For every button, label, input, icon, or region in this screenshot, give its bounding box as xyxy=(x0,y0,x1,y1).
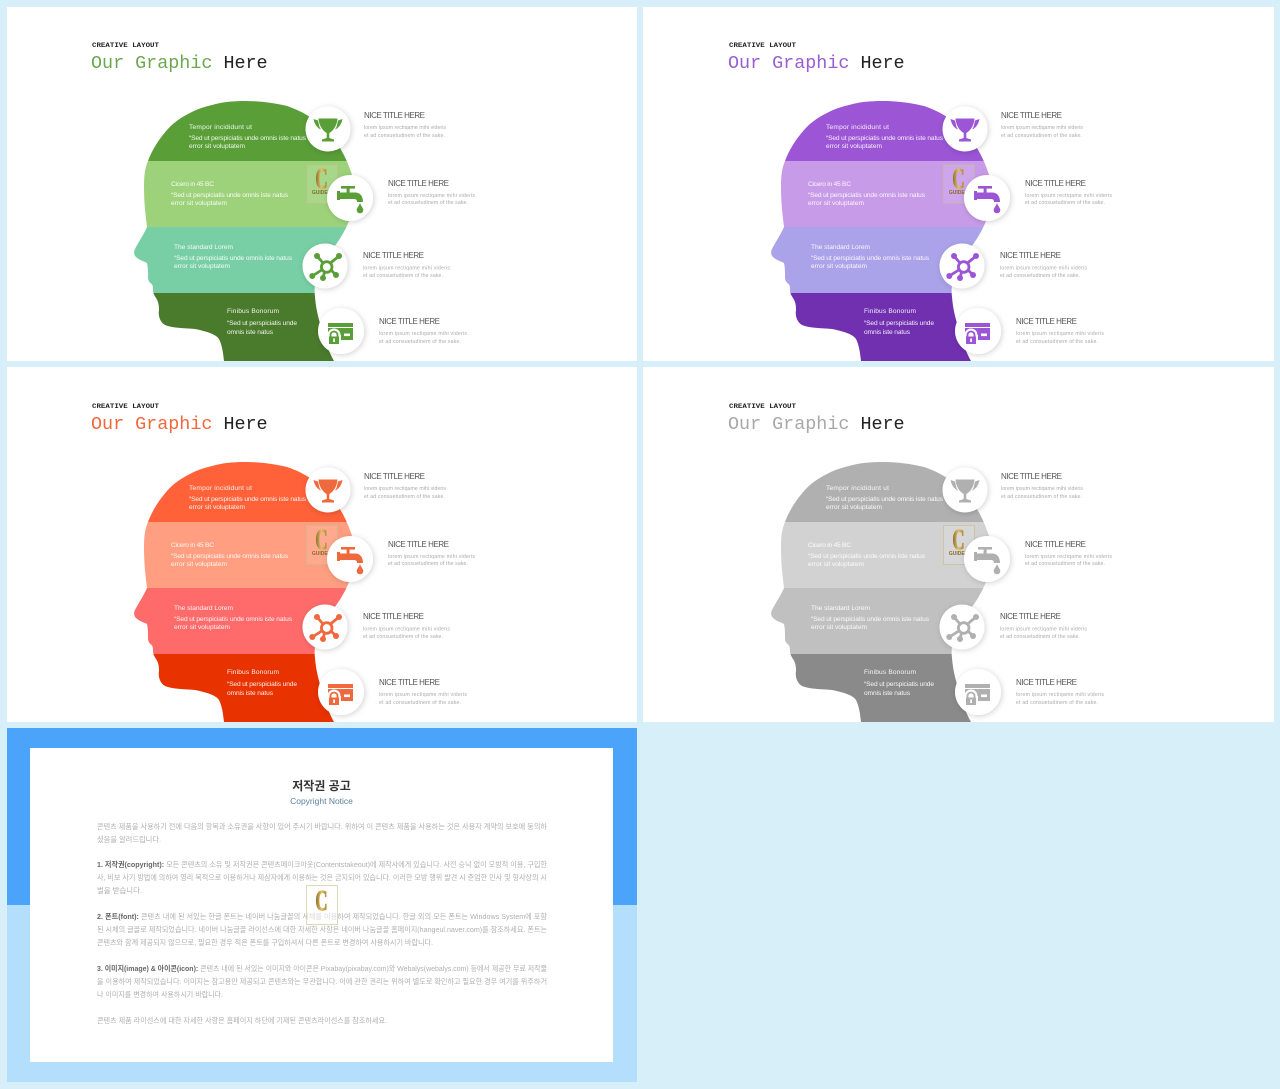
item text blocks: NICE TITLE HERE xyxy=(1016,317,1077,326)
head text blocks: “Sed ut perspiciatis unde omnis iste natus xyxy=(811,255,930,262)
head text blocks: omnis iste natus xyxy=(227,690,274,697)
item text blocks: NICE TITLE HERE xyxy=(1001,111,1062,120)
head text blocks: error sit voluptatem xyxy=(189,504,246,511)
icon: trophy xyxy=(942,106,988,152)
item text blocks: lorem ipsum rectiqame mihi videris xyxy=(1001,125,1083,131)
head text blocks: error sit voluptatem xyxy=(826,504,882,511)
heading: purple: CREATIVE LAYOUT xyxy=(729,42,796,49)
icon: card lock xyxy=(955,669,1001,715)
head text blocks: “Sed ut perspiciatis unde omnis iste natus xyxy=(171,192,289,199)
head text blocks: “Sed ut perspiciatis unde xyxy=(227,681,297,688)
head text blocks: omnis iste natus xyxy=(864,329,911,336)
copyright body text: 2. 폰트(font): 콘텐츠 내에 된 서있는 한글 폰트는 네이버 나눔글꼴의 서체를 이용하여 제작되었습니다. 한글 외의 모든 폰트는 Windows System에 포함 xyxy=(97,912,547,921)
item text blocks: lorem ipsum rectiqame mihi videris xyxy=(364,125,446,131)
item text blocks: lorem ipsum rectiqame mihi videris xyxy=(1025,554,1112,560)
head silhouette: orange bands xyxy=(134,462,352,722)
item text blocks xyxy=(1000,111,1112,345)
head text blocks xyxy=(171,124,307,336)
item text blocks: lorem ipsum rectiqame mihi videris xyxy=(388,193,475,199)
heading: purple: Our Graphic Here xyxy=(728,53,905,74)
heading: gray: Our Graphic Here xyxy=(728,414,905,435)
watermark xyxy=(306,886,338,924)
panel: purple head infographic xyxy=(643,7,1274,361)
head text blocks: “Sed ut perspiciatis unde xyxy=(864,320,934,327)
icon: card lock xyxy=(318,308,364,354)
heading: orange: Our Graphic Here xyxy=(91,414,268,435)
item text blocks: lorem ipsum rectiqame mihi videris xyxy=(363,626,450,632)
icon: network xyxy=(940,604,984,650)
head silhouette: green bands xyxy=(134,101,352,361)
copyright body text: 콘텐츠 제품 라이선스에 대한 자세한 사항은 홈페이지 하단에 기재된 콘텐츠라이선스를 참조하세요. xyxy=(97,1016,387,1025)
head text blocks: The standard Lorem xyxy=(174,244,234,251)
copyright heading: 저작권 공고 xyxy=(292,778,351,793)
watermark xyxy=(306,525,338,564)
watermark: C xyxy=(316,525,328,556)
item text blocks: et ad consuetudinem of the sake. xyxy=(364,133,445,139)
head text blocks: Tempor incididunt ut xyxy=(189,124,252,131)
icon: network xyxy=(940,244,984,288)
head text blocks: “Sed ut perspiciatis unde omnis iste natus xyxy=(808,553,926,560)
item text blocks: NICE TITLE HERE xyxy=(1001,472,1062,481)
heading: purple xyxy=(728,42,905,74)
head text blocks: The standard Lorem xyxy=(174,605,234,612)
head text blocks: Finibus Bonorum xyxy=(864,308,916,315)
head text blocks: “Sed ut perspiciatis unde xyxy=(864,681,934,688)
icon: tap xyxy=(327,536,373,582)
head text blocks: error sit voluptatem xyxy=(171,200,228,207)
icon: trophy xyxy=(306,468,350,512)
item text blocks: et ad consuetudinem of the sake. xyxy=(379,339,461,345)
watermark: C xyxy=(316,164,328,195)
copyright heading: Copyright Notice xyxy=(290,796,353,806)
icon: tap xyxy=(964,175,1010,221)
item text blocks: et ad consuetudinem of the sake. xyxy=(388,561,468,567)
item text blocks: et ad consuetudinem of the sake. xyxy=(1000,634,1080,640)
watermark: GUIDES xyxy=(312,190,332,196)
icon: card lock xyxy=(318,669,364,715)
panel: orange head infographic xyxy=(7,367,637,722)
copyright body text: 사, 비보 사기 방법에 의하여 영리 목적으로 이용하거나 제삼자에게 이용하는 것은 금지되어 있습니다. 이러한 모방 행위 발견 시 준엄한 민사 및 형사상의 시 xyxy=(97,873,547,882)
item text blocks: et ad consuetudinem of the sake. xyxy=(363,273,443,279)
item text blocks: lorem ipsum rectiqame mihi videris xyxy=(1025,193,1112,199)
panel: gray head infographic xyxy=(643,367,1274,722)
item text blocks: et ad consuetudinem of the sake. xyxy=(1016,339,1098,345)
copyright body text: 나 이미지를 변경하여 사용하시기 바랍니다. xyxy=(97,990,223,999)
watermark xyxy=(944,164,974,204)
head text blocks: omnis iste natus xyxy=(864,690,911,697)
item text blocks: NICE TITLE HERE xyxy=(1025,179,1086,188)
icon: trophy xyxy=(942,468,988,512)
watermark xyxy=(306,164,338,204)
copyright body text: 콘텐츠 제품을 사용하기 전에 다음의 항목과 소유권을 사항이 있어 주시기 바랍니다. 위하여 이 콘텐츠 제품을 사용하는 것은 사용자 계약의 보호에 동의하 xyxy=(97,822,547,831)
icon: card lock xyxy=(955,308,1001,354)
heading: orange: CREATIVE LAYOUT xyxy=(92,403,159,410)
item text blocks: et ad consuetudinem of the sake. xyxy=(379,700,461,706)
head text blocks: “Sed ut perspiciatis unde omnis iste natus xyxy=(174,616,293,623)
item text blocks xyxy=(1000,472,1112,706)
item text blocks: NICE TITLE HERE xyxy=(388,540,449,549)
watermark xyxy=(944,525,974,564)
copyright body text: 을 이용하여 제작되었습니다. 이미지는 참고용만 제공되고 콘텐츠와는 무관합니다. 이에 관한 권리는 위하여 별도로 확인하고 필요한 경우 여기를 위주하거 xyxy=(97,977,547,986)
head text blocks: Cicero in 45 BC xyxy=(171,181,214,188)
heading: green: Our Graphic Here xyxy=(91,53,268,74)
panel: green head infographic xyxy=(7,7,637,361)
head text blocks: Tempor incididunt ut xyxy=(189,485,252,492)
head text blocks: error sit voluptatem xyxy=(826,143,882,150)
watermark: GUIDES xyxy=(312,551,332,557)
head text blocks: “Sed ut perspiciatis unde omnis iste natus xyxy=(174,255,293,262)
head text blocks: error sit voluptatem xyxy=(811,624,868,631)
item text blocks: NICE TITLE HERE xyxy=(363,612,424,621)
head text blocks: Cicero in 45 BC xyxy=(171,542,214,549)
item text blocks: lorem ipsum rectiqame mihi videris xyxy=(364,486,446,492)
head text blocks: The standard Lorem xyxy=(811,244,870,251)
head text blocks: error sit voluptatem xyxy=(174,263,230,270)
item text blocks: NICE TITLE HERE xyxy=(1016,678,1077,687)
head text blocks: Tempor incididunt ut xyxy=(826,124,889,131)
item text blocks: lorem ipsum rectiqame mihi videris xyxy=(1000,626,1087,632)
panel: copyright notice xyxy=(7,728,637,1082)
icon: network xyxy=(302,244,348,288)
heading: green xyxy=(91,42,268,74)
head text blocks: “Sed ut perspiciatis unde omnis iste natus xyxy=(811,616,930,623)
head text blocks: error sit voluptatem xyxy=(189,143,246,150)
head text blocks: Finibus Bonorum xyxy=(864,669,916,676)
head text blocks xyxy=(808,485,944,697)
watermark: C xyxy=(952,164,964,195)
copyright body text: 3. 이미지(image) & 아이콘(icon): 콘텐츠 내에 된 서있는 이미지와 아이콘은 Pixabay(pixabay.com)와 Webalys(webalys.com) 등에서 제공한 무료 저작물 xyxy=(97,964,547,973)
head text blocks: Cicero in 45 BC xyxy=(808,181,851,188)
icon: tap xyxy=(327,175,373,221)
heading: gray: CREATIVE LAYOUT xyxy=(729,403,796,410)
head text blocks: error sit voluptatem xyxy=(171,561,228,568)
item text blocks: NICE TITLE HERE xyxy=(379,317,440,326)
head text blocks: “Sed ut perspiciatis unde omnis iste natus xyxy=(826,496,944,503)
head text blocks: Tempor incididunt ut xyxy=(826,485,889,492)
copyright body text: 1. 저작권(copyright): 모든 콘텐츠의 소유 및 저작권은 콘텐츠메이크아웃(Contentstakeout)에 제작사에게 있습니다. 사전 승낙 없이 모방적 이용, 구입한 xyxy=(97,860,547,869)
head text blocks: “Sed ut perspiciatis unde omnis iste natus xyxy=(826,135,944,142)
item text blocks: NICE TITLE HERE xyxy=(364,472,425,481)
head text blocks: “Sed ut perspiciatis unde omnis iste natus xyxy=(189,135,307,142)
item text blocks: et ad consuetudinem of the sake. xyxy=(1001,133,1082,139)
head text blocks xyxy=(808,124,944,336)
heading: gray xyxy=(728,403,905,435)
copyright heading xyxy=(290,778,353,806)
watermark: GUIDES xyxy=(949,190,969,196)
item text blocks: lorem ipsum rectiqame mihi videris xyxy=(379,331,467,337)
item text blocks: et ad consuetudinem of the sake. xyxy=(1025,200,1105,206)
item text blocks: NICE TITLE HERE xyxy=(364,111,425,120)
heading: green: CREATIVE LAYOUT xyxy=(92,42,159,49)
item text blocks: lorem ipsum rectiqame mihi videris xyxy=(1000,266,1087,272)
item text blocks: NICE TITLE HERE xyxy=(379,678,440,687)
item text blocks: lorem ipsum rectiqame mihi videris xyxy=(1001,486,1083,492)
item text blocks: NICE TITLE HERE xyxy=(1000,612,1061,621)
item text blocks: lorem ipsum rectiqame mihi videris xyxy=(388,554,475,560)
head silhouette: purple bands xyxy=(771,101,989,361)
item text blocks: lorem ipsum rectiqame mihi videris xyxy=(363,266,450,272)
head text blocks: error sit voluptatem xyxy=(808,200,864,207)
head text blocks: The standard Lorem xyxy=(811,605,870,612)
watermark: C xyxy=(316,886,328,917)
icon: trophy xyxy=(306,106,350,152)
head text blocks: Cicero in 45 BC xyxy=(808,542,851,549)
item text blocks: NICE TITLE HERE xyxy=(363,251,424,260)
head text blocks: Finibus Bonorum xyxy=(227,669,280,676)
head text blocks: “Sed ut perspiciatis unde omnis iste natus xyxy=(808,192,926,199)
icon: tap xyxy=(964,536,1010,582)
item text blocks: et ad consuetudinem of the sake. xyxy=(1001,494,1082,500)
item text blocks: lorem ipsum rectiqame mihi videris xyxy=(1016,692,1104,698)
item text blocks: NICE TITLE HERE xyxy=(388,179,449,188)
head text blocks xyxy=(171,485,307,697)
heading: orange xyxy=(91,403,268,435)
item text blocks: lorem ipsum rectiqame mihi videris xyxy=(379,692,467,698)
copyright body text: 된 시체의 글꼴로 제작되었습니다. 네이버 나눔글꼴 라이선스에 대한 자세한 사항은 네이버 나눔글꼴 홈페이지(hangeul.naver.com)를 참조하세요. 폰트는 xyxy=(97,925,547,934)
head text blocks: “Sed ut perspiciatis unde omnis iste natus xyxy=(171,553,289,560)
item text blocks: NICE TITLE HERE xyxy=(1025,540,1086,549)
watermark: C xyxy=(952,525,964,556)
item text blocks: et ad consuetudinem of the sake. xyxy=(388,200,468,206)
item text blocks: lorem ipsum rectiqame mihi videris xyxy=(1016,331,1104,337)
item text blocks: NICE TITLE HERE xyxy=(1000,251,1061,260)
item text blocks xyxy=(363,111,475,345)
head text blocks: error sit voluptatem xyxy=(174,624,230,631)
head text blocks: error sit voluptatem xyxy=(808,561,864,568)
head text blocks: “Sed ut perspiciatis unde xyxy=(227,320,297,327)
head text blocks: “Sed ut perspiciatis unde omnis iste natus xyxy=(189,496,307,503)
icon: network xyxy=(302,604,348,650)
item text blocks: et ad consuetudinem of the sake. xyxy=(1000,273,1080,279)
watermark: GUIDES xyxy=(949,551,969,557)
head silhouette: gray bands xyxy=(771,462,989,722)
copyright body text: 콘텐츠와 함께 제공되지 않으므로, 필요한 경우 적은 폰트를 구입하셔서 다른 폰트로 변경하여 사용하시기 바랍니다. xyxy=(97,938,433,947)
head text blocks: omnis iste natus xyxy=(227,329,274,336)
head text blocks: Finibus Bonorum xyxy=(227,308,280,315)
item text blocks: et ad consuetudinem of the sake. xyxy=(1016,700,1098,706)
item text blocks xyxy=(363,472,475,706)
head text blocks: error sit voluptatem xyxy=(811,263,868,270)
copyright body text: 셨음을 알려드립니다. xyxy=(97,835,161,844)
copyright body text xyxy=(97,822,547,1025)
item text blocks: et ad consuetudinem of the sake. xyxy=(364,494,445,500)
copyright body text: 벌을 받습니다. xyxy=(97,886,142,895)
item text blocks: et ad consuetudinem of the sake. xyxy=(363,634,443,640)
item text blocks: et ad consuetudinem of the sake. xyxy=(1025,561,1105,567)
